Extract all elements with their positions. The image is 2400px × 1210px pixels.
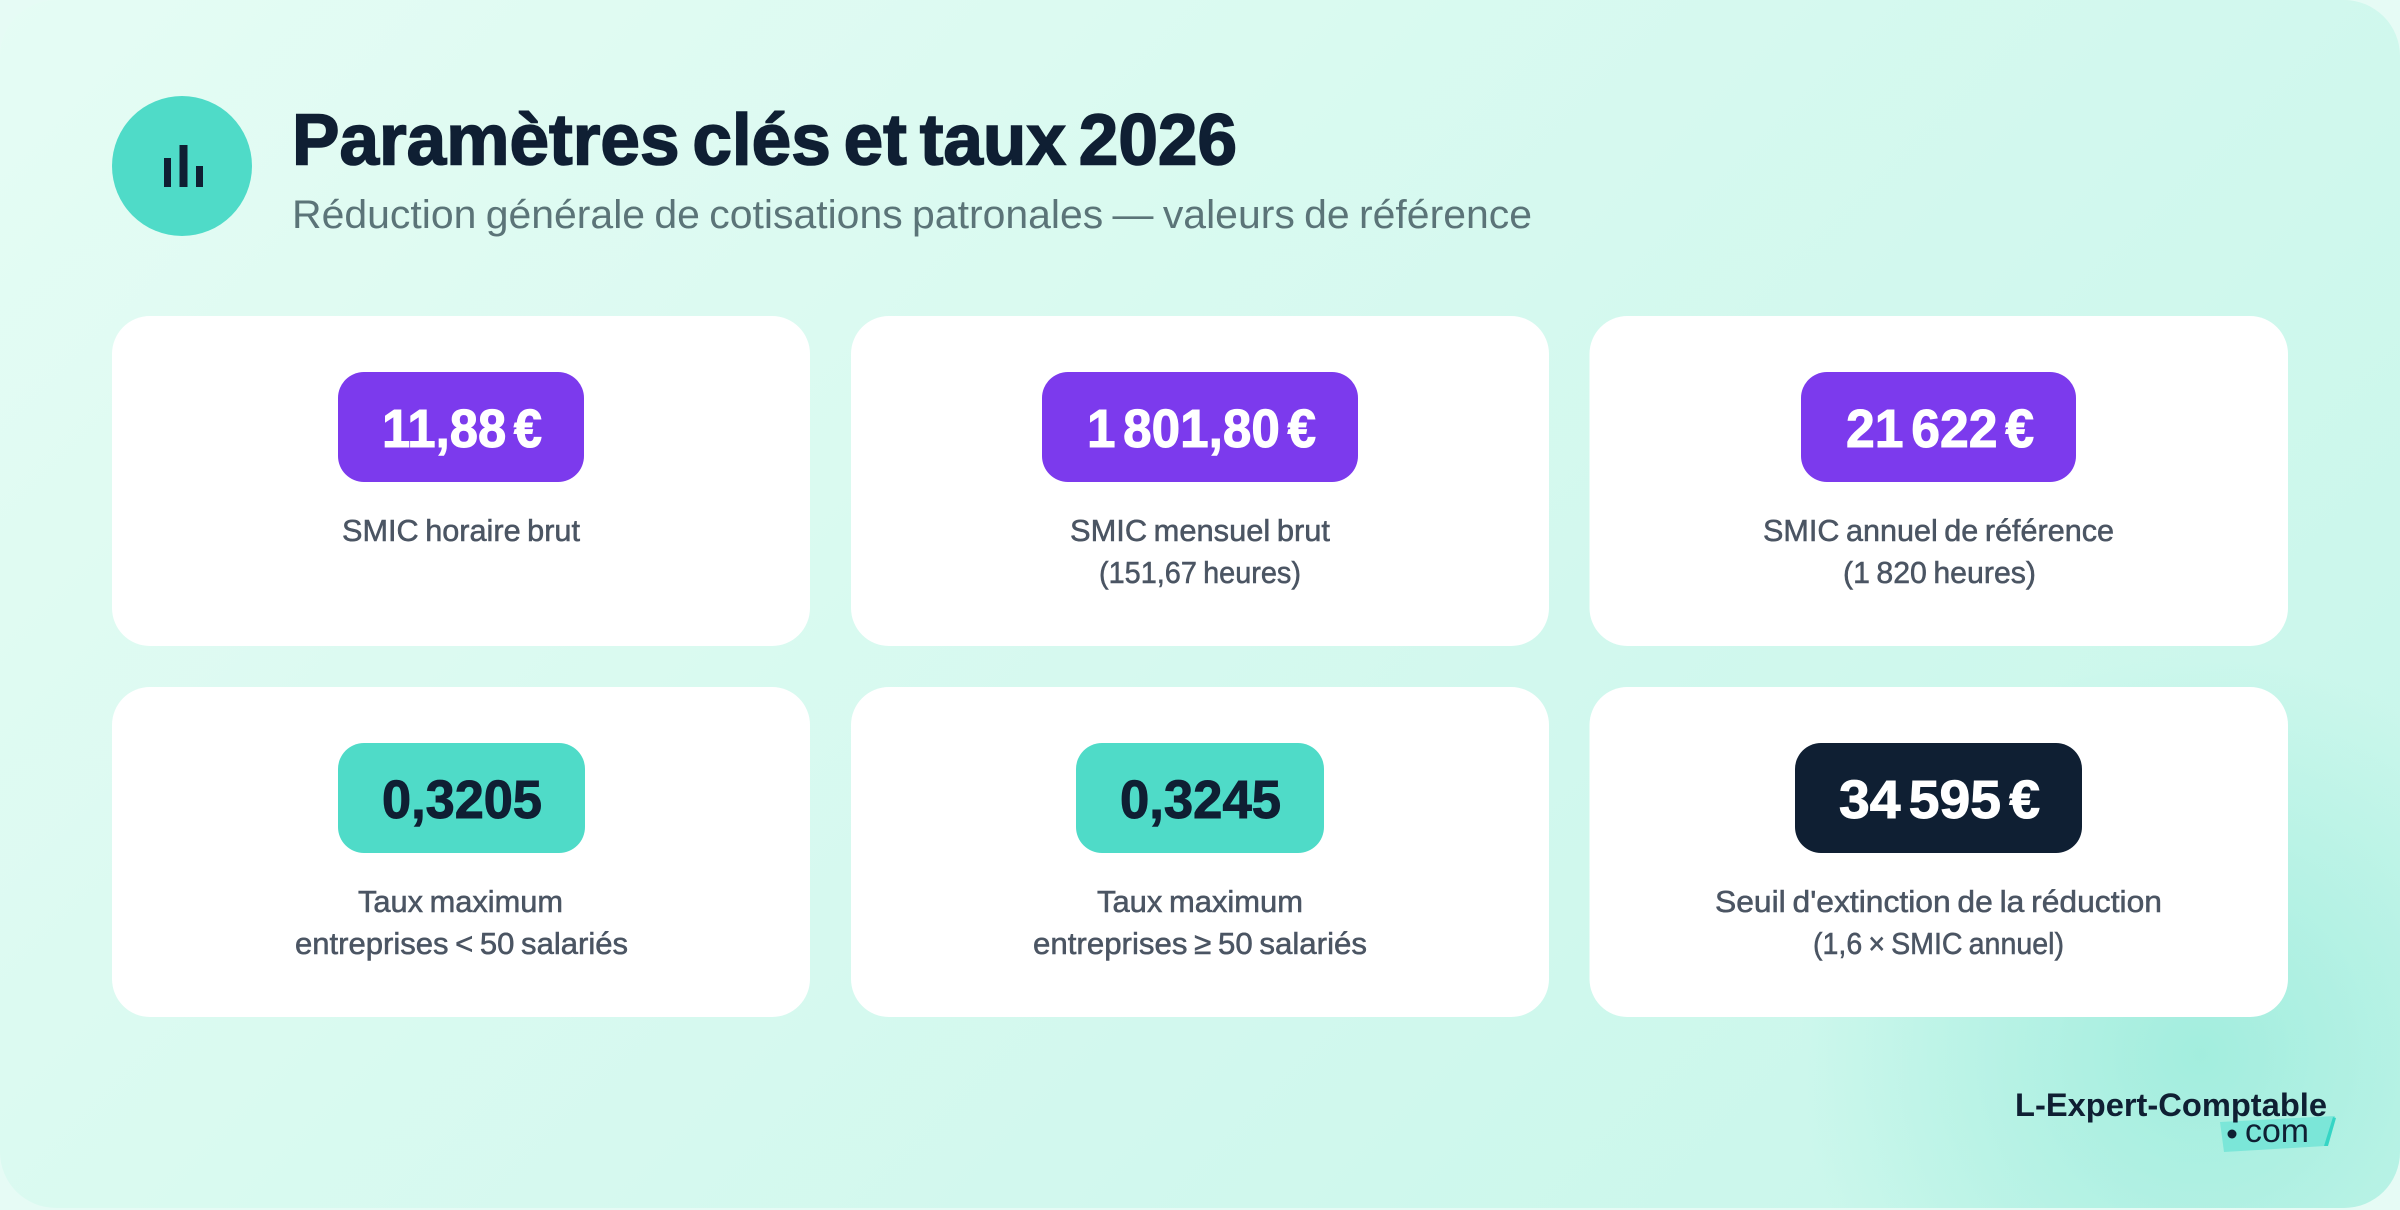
value badge: 0,3205 bbox=[338, 743, 585, 853]
label: (1,6 × SMIC annuel) bbox=[1813, 926, 2064, 961]
value badge: 0,3205: 0,3205 bbox=[382, 770, 542, 830]
label bbox=[1715, 884, 2162, 961]
icon: bar chart in circle bbox=[112, 96, 252, 236]
label: Taux maximum bbox=[358, 884, 563, 919]
panel: SMIC annuel de référence bbox=[1590, 316, 2288, 646]
panel: SMIC mensuel brut bbox=[851, 316, 1549, 646]
value badge: 0,3245 bbox=[1076, 743, 1324, 853]
panel: taux maximum moins de 50 salariés bbox=[112, 687, 810, 1017]
label: (151,67 heures) bbox=[1099, 555, 1301, 590]
label: SMIC horaire brut bbox=[342, 513, 580, 548]
panel: SMIC horaire brut bbox=[112, 316, 810, 646]
label bbox=[295, 884, 628, 961]
value badge: 1 801,80 €: 1 801,80 € bbox=[1087, 399, 1316, 459]
panel: taux maximum 50 salariés et plus bbox=[851, 687, 1549, 1017]
label: Taux maximum bbox=[1097, 884, 1303, 919]
value badge: 1 801,80 € bbox=[1042, 372, 1358, 482]
label: Seuil d'extinction de la réduction bbox=[1715, 884, 2162, 919]
label: (1 820 heures) bbox=[1843, 555, 2036, 590]
panel: seuil d'extinction bbox=[1590, 687, 2288, 1017]
value badge: 34 595 €: 34 595 € bbox=[1839, 770, 2040, 830]
label: entreprises < 50 salariés bbox=[295, 926, 628, 961]
value badge: 11,88 € bbox=[338, 372, 584, 482]
value badge: 34 595 € bbox=[1795, 743, 2082, 853]
value badge: 0,3245: 0,3245 bbox=[1120, 770, 1281, 830]
value badge: 21 622 € bbox=[1801, 372, 2076, 482]
value badge: 11,88 €: 11,88 € bbox=[382, 399, 542, 459]
label: entreprises ≥ 50 salariés bbox=[1033, 926, 1367, 961]
value badge: 21 622 €: 21 622 € bbox=[1846, 399, 2034, 459]
label: SMIC mensuel brut bbox=[1070, 513, 1330, 548]
label bbox=[1033, 884, 1367, 961]
logo: L-Expert-Comptable.com bbox=[2015, 1087, 2336, 1152]
title: Paramètres clés et taux 2026 bbox=[292, 100, 1237, 180]
label bbox=[1763, 513, 2114, 590]
subtitle: Réduction générale de cotisations patronales — valeurs de référence bbox=[292, 193, 1532, 237]
label: SMIC annuel de référence bbox=[1763, 513, 2114, 548]
label bbox=[1070, 513, 1330, 590]
logo: L-Expert-Comptable.com: L-Expert-Comptable bbox=[2015, 1087, 2327, 1123]
logo: L-Expert-Comptable.com: com bbox=[2245, 1112, 2309, 1149]
